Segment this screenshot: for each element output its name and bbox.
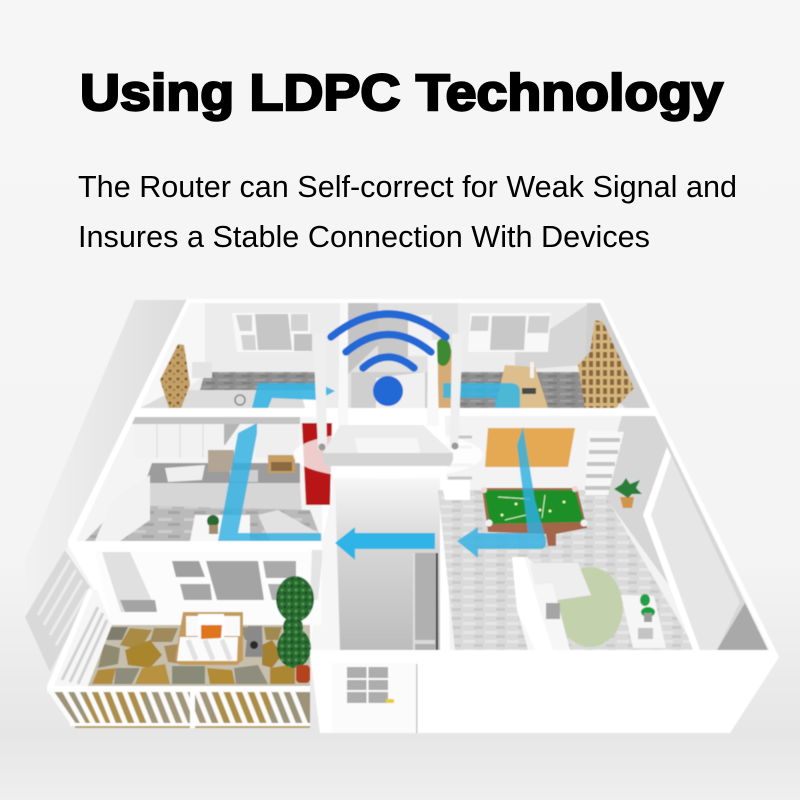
office desk xyxy=(495,362,548,408)
side table xyxy=(245,626,263,657)
green rug xyxy=(557,567,623,647)
kitchen crate xyxy=(268,455,295,473)
stone floor xyxy=(87,625,310,686)
front railing xyxy=(47,686,310,728)
house drop shadow xyxy=(25,300,188,672)
tall plant xyxy=(276,576,314,683)
left railing xyxy=(47,588,112,690)
bedroom art xyxy=(160,344,190,408)
room: central rooms behind router xyxy=(347,303,458,408)
lower left room with windows xyxy=(68,541,322,625)
room: top right office xyxy=(458,303,650,408)
room: living room xyxy=(438,416,770,650)
front wall xyxy=(310,650,779,733)
sofa xyxy=(512,557,591,650)
potted plant behind router xyxy=(438,350,452,408)
room: kitchen xyxy=(76,417,332,541)
potted plant xyxy=(614,478,642,508)
arrow: hallway xyxy=(335,527,435,560)
subtitle: The Router can Self-correct for Weak Signal and xyxy=(78,170,737,204)
balcony seating xyxy=(175,612,243,665)
floor plan illustration xyxy=(25,299,779,733)
bookshelf xyxy=(578,320,634,408)
left shelves xyxy=(448,437,472,478)
arrow: kitchen xyxy=(218,423,321,541)
title: Using LDPC Technology xyxy=(80,64,724,121)
subtitle xyxy=(78,170,737,254)
arrow: office xyxy=(443,383,520,408)
orange wall rug xyxy=(485,428,575,467)
arrow: living room xyxy=(457,427,546,558)
coffee table xyxy=(621,594,666,648)
room: hallway xyxy=(310,478,440,650)
right shelves xyxy=(585,430,624,495)
balcony xyxy=(47,576,314,728)
door xyxy=(332,663,418,733)
red fridge xyxy=(302,423,332,505)
router halo xyxy=(293,431,483,479)
subtitle: Insures a Stable Connection With Devices xyxy=(78,220,650,254)
router xyxy=(313,303,463,466)
room: top left bedroom xyxy=(140,303,347,408)
icon: wifi signal xyxy=(331,314,446,406)
arrow: bedroom xyxy=(252,383,335,408)
kitchen plant xyxy=(207,515,219,534)
pool table xyxy=(481,486,588,546)
house shell xyxy=(68,299,779,733)
